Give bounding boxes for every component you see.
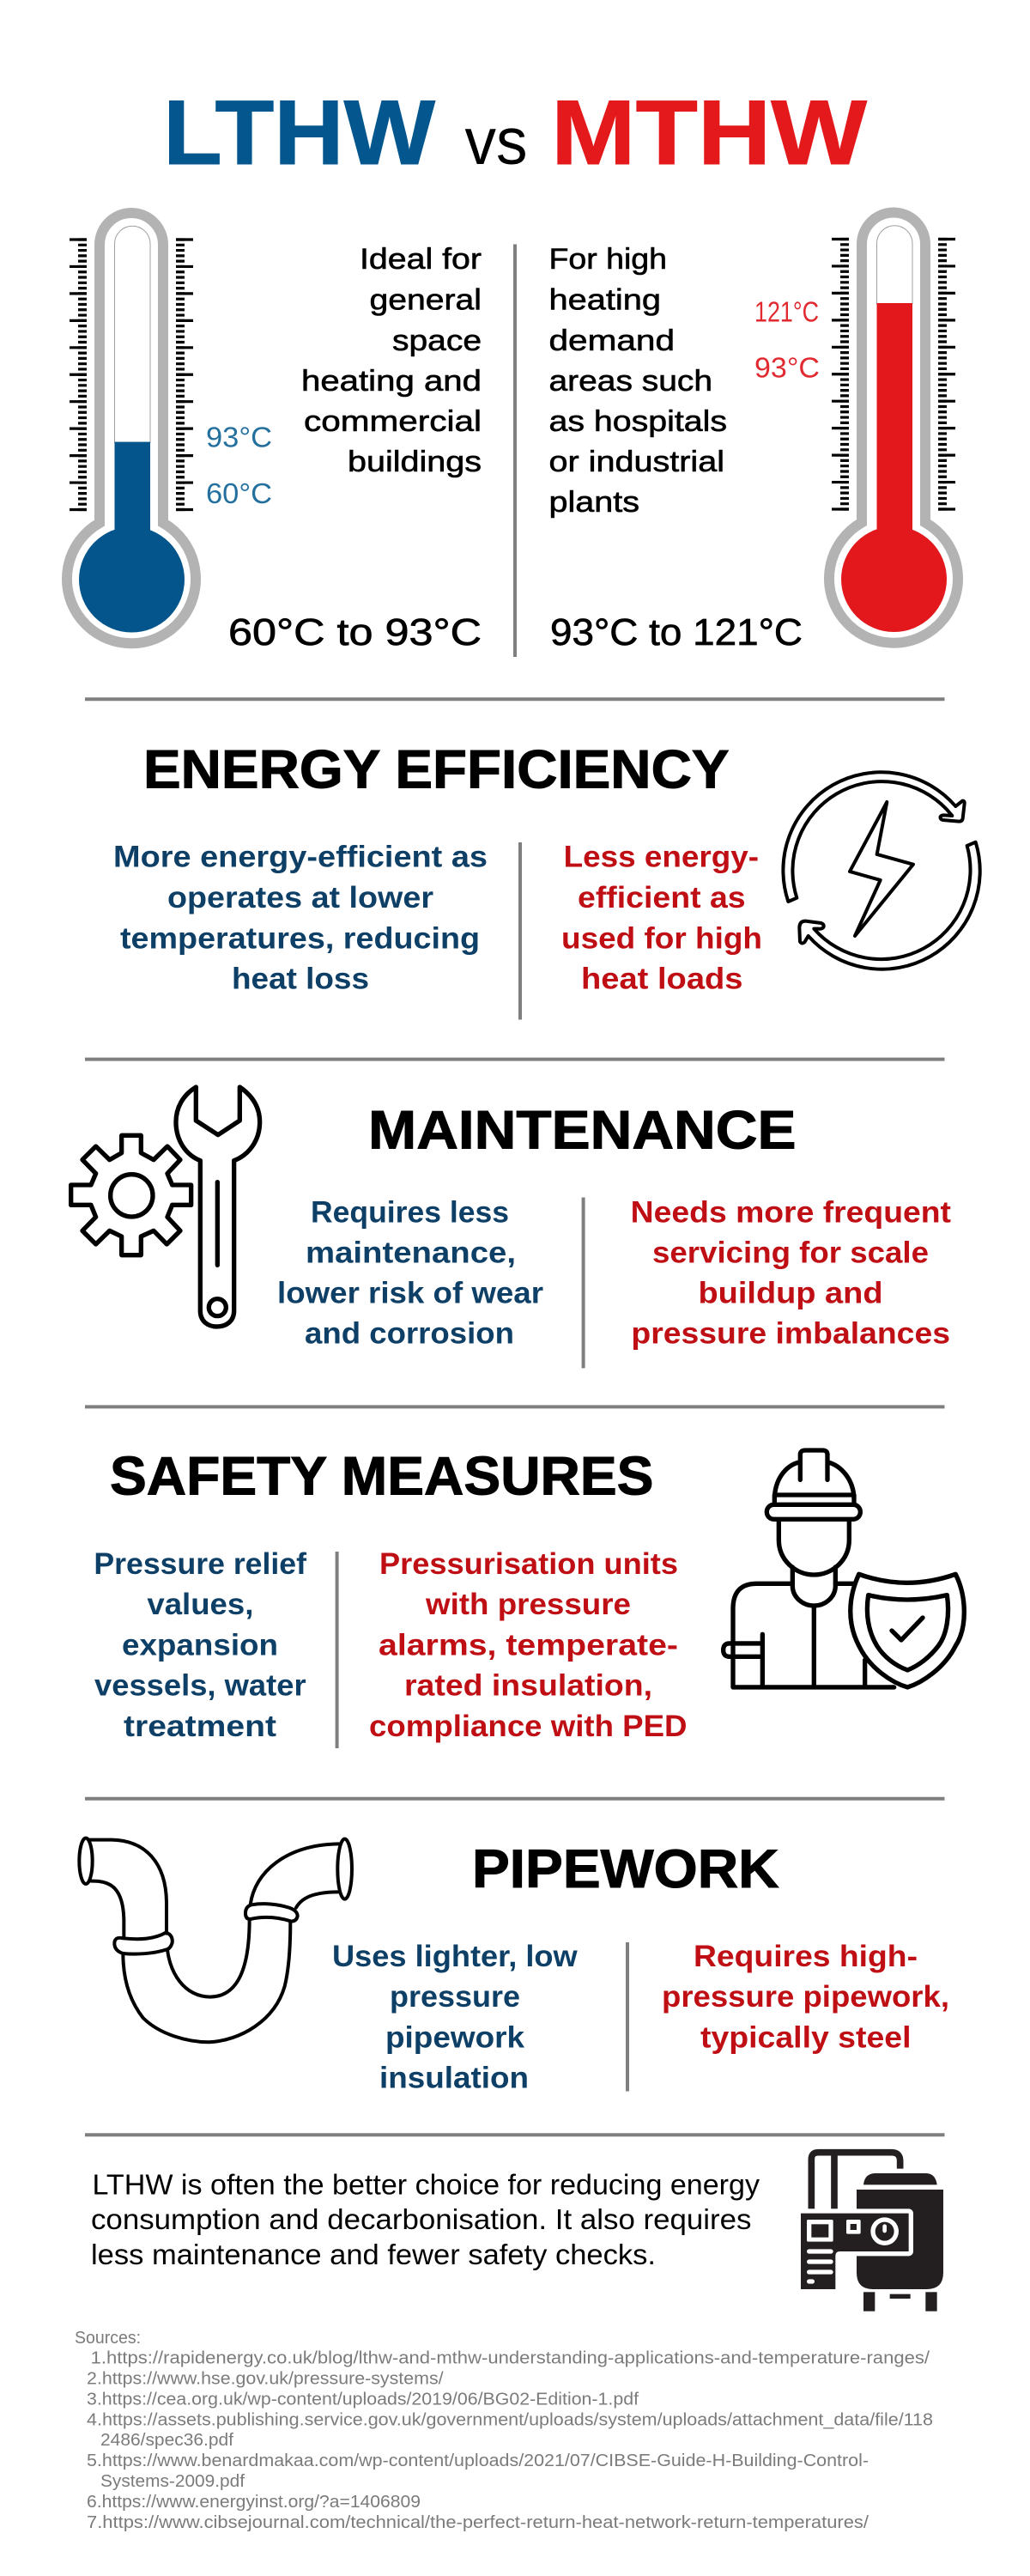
MTHW maintenance text: Needs more frequent xyxy=(631,1195,951,1229)
conclusion text: consumption and decarbonisation. It also requires xyxy=(91,2203,752,2235)
LTHW safety text: treatment xyxy=(124,1710,276,1743)
sources: 2486/spec36.pdf xyxy=(100,2431,233,2450)
icon: boiler xyxy=(801,2153,943,2312)
panel: maintenance xyxy=(71,1087,951,1368)
MTHW maintenance text: servicing for scale xyxy=(652,1236,929,1269)
thermometer: LTHW xyxy=(67,213,196,643)
LTHW pipework text xyxy=(332,1940,578,2095)
LTHW energy text: temperatures, reducing xyxy=(120,922,480,956)
MTHW safety text: alarms, temperate- xyxy=(379,1628,678,1662)
MTHW temperature labels xyxy=(754,295,820,383)
MTHW energy text: Less energy- xyxy=(564,841,759,874)
MTHW energy text: used for high xyxy=(561,922,762,956)
MTHW description: or industrial xyxy=(549,446,724,478)
LTHW safety text: values, xyxy=(147,1588,253,1621)
MTHW pipework text: pressure pipework, xyxy=(662,1980,949,2014)
MTHW safety text: with pressure xyxy=(425,1588,631,1621)
sources: Sources: xyxy=(75,2329,141,2348)
LTHW temperature labels: 93°C xyxy=(206,421,272,453)
MTHW maintenance text xyxy=(631,1195,951,1350)
LTHW description: buildings xyxy=(348,446,482,478)
MTHW range: 93°C to 121°C xyxy=(550,611,803,653)
LTHW safety text: vessels, water xyxy=(94,1669,306,1703)
MTHW energy text xyxy=(561,841,762,996)
LTHW energy text xyxy=(113,841,488,996)
LTHW pipework text: pipework xyxy=(385,2020,525,2054)
MTHW description: For high xyxy=(549,243,667,276)
MTHW description: heating xyxy=(549,283,661,316)
MTHW pipework text: Requires high- xyxy=(694,1940,918,1973)
LTHW temperature labels: 60°C xyxy=(206,477,272,509)
LTHW energy text: More energy-efficient as xyxy=(113,841,488,874)
LTHW description: Ideal for xyxy=(360,243,482,276)
MTHW description xyxy=(549,243,727,519)
conclusion text: less maintenance and fewer safety checks. xyxy=(91,2239,656,2270)
LTHW description: general xyxy=(369,283,482,316)
LTHW safety text: Pressure relief xyxy=(94,1547,306,1581)
LTHW range: 60°C to 93°C xyxy=(228,611,482,653)
title: MTHW xyxy=(551,81,867,184)
heading: pipework: PIPEWORK xyxy=(472,1839,779,1899)
MTHW description: areas such xyxy=(549,365,712,398)
MTHW temperature labels: 121°C xyxy=(754,295,819,328)
LTHW safety text: expansion xyxy=(122,1628,278,1662)
MTHW pipework text xyxy=(662,1940,949,2054)
MTHW energy text: efficient as xyxy=(578,881,746,914)
LTHW safety text xyxy=(94,1547,306,1743)
thermometer: MTHW xyxy=(829,213,958,643)
MTHW safety text: rated insulation, xyxy=(404,1669,652,1703)
title: LTHW xyxy=(163,81,435,184)
heading: maintenance: MAINTENANCE xyxy=(368,1101,797,1161)
sources: 5.https://www.benardmakaa.com/wp-content/uploads/2021/07/CIBSE-Guide-H-Building-Control- xyxy=(87,2451,869,2470)
icon: energy cycle xyxy=(783,772,980,969)
title xyxy=(163,81,867,184)
icon: worker with shield xyxy=(724,1450,964,1687)
title: vs xyxy=(465,105,527,179)
MTHW description: demand xyxy=(549,325,675,357)
conclusion text xyxy=(91,2169,760,2270)
LTHW maintenance text xyxy=(277,1195,543,1350)
sources: 4.https://assets.publishing.service.gov.uk/government/uploads/system/uploads/attachment_data/file/118 xyxy=(87,2410,933,2429)
MTHW temperature labels: 93°C xyxy=(754,351,820,383)
LTHW energy text: operates at lower xyxy=(167,881,433,914)
LTHW maintenance text: maintenance, xyxy=(306,1236,516,1269)
LTHW pipework text: pressure xyxy=(390,1980,520,2014)
MTHW maintenance text: pressure imbalances xyxy=(631,1316,950,1350)
LTHW description: heating and xyxy=(301,365,482,398)
heading: safety measures: SAFETY MEASURES xyxy=(110,1447,654,1507)
sources: 3.https://cea.org.uk/wp-content/uploads/2019/06/BG02-Edition-1.pdf xyxy=(87,2390,639,2409)
MTHW description: as hospitals xyxy=(549,405,727,438)
MTHW pipework text: typically steel xyxy=(700,2020,912,2054)
MTHW energy text: heat loads xyxy=(581,963,743,996)
LTHW description xyxy=(301,243,482,478)
sources: Systems-2009.pdf xyxy=(100,2472,245,2491)
sources xyxy=(75,2329,933,2532)
LTHW pipework text: Uses lighter, low xyxy=(332,1940,578,1973)
sources: 7.https://www.cibsejournal.com/technical/the-perfect-return-heat-network-return-temperatures/ xyxy=(87,2513,869,2532)
icon: pipe xyxy=(79,1838,352,2042)
icon: gear and wrench xyxy=(71,1087,260,1327)
LTHW description: space xyxy=(392,325,482,357)
sources: 6.https://www.energyinst.org/?a=1406809 xyxy=(87,2493,421,2512)
MTHW safety text: Pressurisation units xyxy=(379,1547,678,1581)
LTHW energy text: heat loss xyxy=(232,963,369,996)
sources: 2.https://www.hse.gov.uk/pressure-systems/ xyxy=(87,2370,444,2389)
MTHW safety text: compliance with PED xyxy=(369,1710,687,1743)
panel: safety measures xyxy=(94,1447,964,1748)
MTHW safety text xyxy=(369,1547,687,1743)
centre divider xyxy=(513,244,517,657)
LTHW temperature labels xyxy=(206,421,272,509)
sources: 1.https://rapidenergy.co.uk/blog/lthw-and-mthw-understanding-applications-and-temperature-ranges/ xyxy=(91,2349,930,2368)
panel: pipework xyxy=(79,1838,949,2095)
MTHW maintenance text: buildup and xyxy=(699,1277,882,1310)
LTHW pipework text: insulation xyxy=(379,2062,529,2095)
LTHW maintenance text: Requires less xyxy=(311,1195,509,1229)
panel: energy efficiency xyxy=(113,740,980,1020)
MTHW description: plants xyxy=(549,486,639,519)
heading: energy efficiency: ENERGY EFFICIENCY xyxy=(143,740,730,800)
LTHW maintenance text: and corrosion xyxy=(305,1316,514,1350)
conclusion text: LTHW is often the better choice for reducing energy xyxy=(93,2169,760,2201)
LTHW maintenance text: lower risk of wear xyxy=(277,1277,543,1310)
LTHW description: commercial xyxy=(304,405,482,438)
